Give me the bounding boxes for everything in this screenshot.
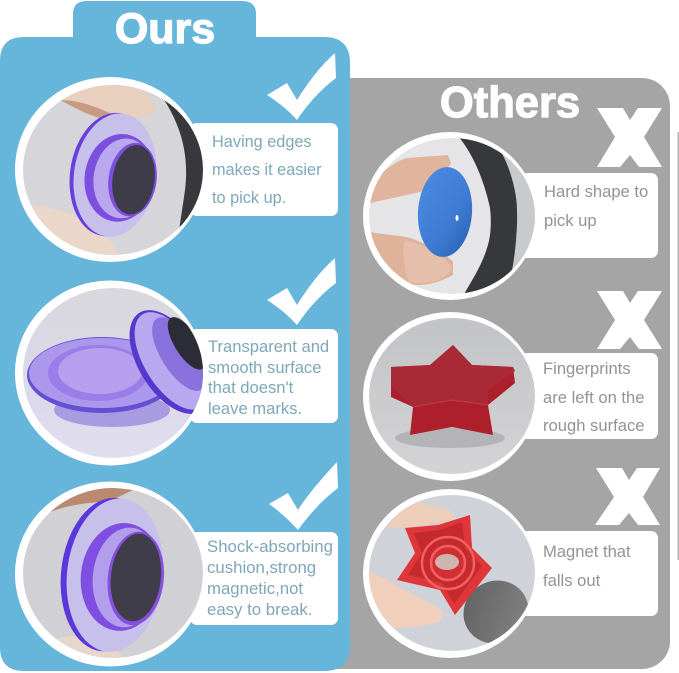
icon: check 3: [269, 462, 338, 530]
text: having edges: to pick up.: [212, 189, 286, 207]
text: shock absorbing: easy to break.: [207, 600, 312, 619]
icon: cross 2: [597, 291, 662, 349]
icon: cross 1: [597, 108, 662, 167]
photo: ours edge magnet: [15, 75, 205, 262]
edge strip: [678, 132, 679, 560]
text: magnet falls out: [520, 531, 658, 616]
photo: others blue magnet: [363, 132, 540, 300]
text: transparent surface: that doesn't: [208, 378, 293, 397]
text: shock absorbing: cushion,strong: [207, 558, 316, 577]
text: hard shape: [520, 173, 658, 258]
text: shock absorbing: [190, 532, 338, 625]
text: transparent surface: smooth surface: [208, 358, 321, 376]
photo: ours cushion magnet: [15, 482, 205, 666]
panel: ours: [0, 1, 350, 671]
panel: others: [300, 78, 670, 669]
text: having edges: Having edges: [212, 133, 312, 151]
text: transparent surface: leave marks.: [208, 398, 302, 418]
text: shock absorbing: Shock-absorbing: [207, 537, 333, 556]
text: magnet falls out: falls out: [543, 570, 600, 590]
text: hard shape: pick up: [544, 210, 597, 230]
icon: cross 3: [595, 468, 660, 525]
photo: others broken star: [363, 489, 540, 658]
icon: check 2: [267, 258, 336, 325]
text: having edges: makes it easier: [212, 161, 322, 179]
heading: ours: Ours: [115, 5, 215, 53]
photo: others red star: [363, 312, 540, 481]
text: hard shape: Hard shape to: [544, 182, 648, 201]
text: fingerprints: rough surface: [543, 416, 644, 435]
text: fingerprints: Fingerprints: [543, 359, 631, 378]
icon: check 1: [267, 53, 336, 120]
text: fingerprints: [520, 353, 658, 439]
text: fingerprints: are left on the: [543, 388, 644, 406]
text: shock absorbing: magnetic,not: [207, 579, 303, 598]
text: transparent surface: Transparent and: [208, 337, 329, 356]
heading: others: Others: [440, 79, 580, 127]
text: having edges: [190, 123, 338, 216]
photo: ours transparent magnet: [15, 280, 203, 466]
photo layer: circular pictures: [15, 77, 535, 666]
text: transparent surface: [190, 329, 338, 423]
text: magnet falls out: Magnet that: [543, 542, 631, 561]
